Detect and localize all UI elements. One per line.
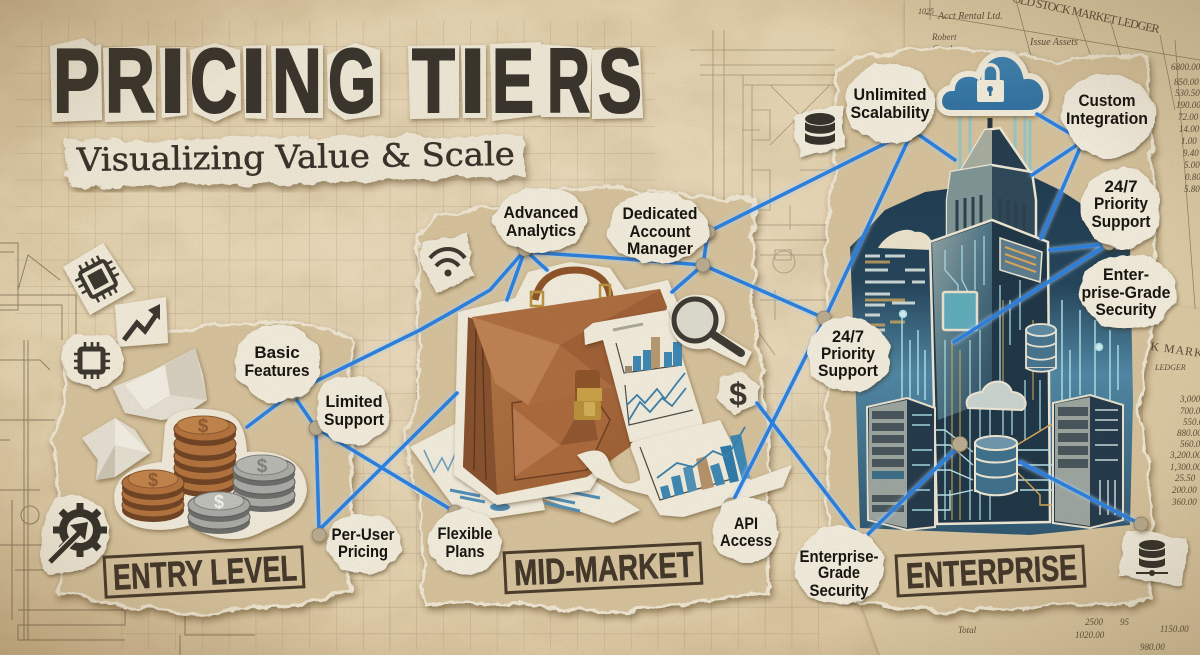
lower glow and traces [900,300,1118,400]
blueprint floor plan top [690,30,835,355]
panel sheet [405,187,768,612]
feature tag: basic features: Basic [254,343,300,362]
feature tag: per-user pricing: Pricing [338,542,388,561]
feature tag: unlimited scalability [845,63,935,143]
feature tag: 24/7 priority support middle: 24/7 [832,327,864,346]
feature tag: dedicated account manager [608,193,708,263]
label: mid-market stamp: MID-MARKET [513,544,695,593]
ledger handwriting: Good [932,44,952,54]
icon: database network [1119,530,1187,588]
server rack: left [867,398,935,530]
title letters: I [460,31,485,132]
small cloud [967,382,1026,410]
title letters: R [105,31,155,132]
feature tag: unlimited scalability: Scalability [850,103,930,122]
artwork: circuit city [850,115,1133,535]
server rack: right [1053,395,1123,528]
icon: cpu chip paper [63,243,134,315]
feature tag: enterprise-grade security right: Enter- [1103,265,1149,284]
ledger figures: 14.00 [1179,124,1200,134]
chart scroll: bottom [577,420,792,517]
feature tag: enterprise-grade security bottom [794,527,884,605]
ledger figures lower: 200.00 [1172,485,1197,495]
ledger figures lower: 25.50 [1175,473,1196,483]
feature tag: 24/7 priority support right [1081,168,1161,248]
title letters: P [53,31,100,132]
blue string connections [247,114,1140,540]
silver right stack: $ [257,456,268,477]
database: central [975,436,1017,495]
subtitle strip: Visualizing Value & Scale [76,135,515,179]
beams above tower [960,115,1030,175]
ledger figures lower: 360.00 [1171,497,1197,507]
feature tag: enterprise-grade security right [1079,254,1177,330]
feature tag: enterprise-grade security bottom: Grade [818,563,860,582]
feature tag: api access: API [734,514,758,533]
handle [535,270,610,300]
feature tag: api access: Access [720,531,772,550]
icon: coin stacks [114,409,307,539]
title letters: E [492,31,534,132]
icon: trending arrow paper [115,297,168,347]
ledger figures: 9.40 [1183,148,1199,158]
title letters: I [160,31,185,132]
ledger figures lower [958,363,1200,652]
feature tag: flexible plans [429,510,501,574]
code lines [865,256,925,330]
feature tag: advanced analytics: Analytics [506,221,576,240]
coin sticker outline [114,409,307,539]
title letter paper cutouts [50,38,643,122]
title letters [53,31,642,132]
copper tall stack [174,416,236,497]
icon: database tag [793,105,845,158]
title letters: R [547,31,590,132]
feature tag: enterprise-grade security right: prise-Grade [1082,283,1170,302]
silver front stack [188,492,250,534]
icon: cloud with padlock [939,54,1046,113]
ledger figures lower: 980.00 [1140,642,1165,652]
icon: magnifier [670,295,752,366]
graph paper grid [15,20,835,650]
copper tall stack: $ [198,416,209,437]
feature tag: limited support: Limited [326,392,382,411]
ledger figures lower: 3,000 [1179,394,1200,404]
title letters: T [412,31,455,132]
ledger figures: 5.00 [1184,160,1200,170]
bag body [463,289,667,495]
feature tag: 24/7 priority support middle [807,317,891,393]
panel: entry level [52,322,352,613]
feature tag: enterprise-grade security right: Security [1096,300,1157,319]
ledger figures: 6800.00 [1171,62,1200,72]
ledger handwriting: Acct Rental Ltd. [937,11,1003,22]
ledger figures: 530.50 [1175,88,1200,98]
feature tag: dedicated account manager: Dedicated [622,204,698,223]
icon: wifi [420,233,474,292]
ledger figures lower: 95 [1120,617,1130,627]
blueprint plan left [0,243,255,655]
label: entry level stamp: ENTRY LEVEL [112,547,298,598]
tower midsection [947,165,1036,238]
feature tag: dedicated account manager: Manager [627,239,693,258]
ledger figures: 1.00 [1181,136,1197,146]
feature tag: custom integration [1061,73,1155,157]
feature tag: basic features: Features [244,361,310,380]
tower base block [930,220,1050,524]
silver front stack: $ [214,492,224,512]
ledger figures lower: 2500 [1085,617,1104,627]
title letters: C [190,31,237,132]
ledger figures lower: Total [958,625,977,635]
feature tag: 24/7 priority support right: Priority [1094,194,1148,213]
feature tag: 24/7 priority support right: Support [1092,212,1151,231]
briefcase sticker outline [454,262,680,505]
icon: dollar: $ [729,376,747,412]
title letters: G [328,31,376,132]
icon: chip blob [61,333,123,387]
ledger handwriting [918,7,1078,54]
title letters: I [241,31,266,132]
silver right stack [233,455,295,512]
feature tag: flexible plans: Plans [446,542,484,561]
tower spire [988,118,992,135]
feature tag: limited support [316,375,390,445]
feature tag: custom integration: Integration [1066,109,1148,128]
panel: enterprise [793,48,1187,610]
panel sheet [52,322,352,613]
feature tag: dedicated account manager: Account [630,222,691,241]
copper small stack [122,470,184,522]
title: pricing tiers [50,31,643,132]
ledger sheet top right [905,0,1200,320]
panel sheet [826,48,1155,610]
icon: dollar [716,373,760,415]
tower chip [943,292,977,330]
feature tag: advanced analytics: Advanced [504,203,578,222]
label: enterprise stamp: ENTERPRISE [905,547,1078,596]
small cloud behind left [878,230,933,250]
feature tag: enterprise-grade security bottom: Security [810,581,869,600]
ledger handwriting: Robert [931,32,957,42]
gold clasp [575,370,600,420]
chart scroll: top [584,310,705,442]
dark sky backdrop [850,177,1133,535]
ledger handwriting: 1025 [918,7,934,16]
ledger sheet lower right [860,300,1200,655]
feature tag: enterprise-grade security bottom: Enterprise- [800,547,878,566]
circuit traces around data [905,425,1062,510]
feature tag: custom integration: Custom [1078,91,1136,110]
feature tag: 24/7 priority support middle: Support [818,361,878,380]
ledger figures lower: 1150.00 [1160,624,1189,634]
feature tag: flexible plans: Flexible [438,524,492,543]
database: upper [1026,324,1056,372]
panel: mid-market [405,187,792,612]
chart papers under briefcase [410,423,640,523]
feature tag: per-user pricing [325,513,401,573]
ledger handwriting: Issue Assets [1029,37,1078,48]
ledger figures: 850.00 [1174,77,1199,87]
title letters: S [598,31,642,132]
ledger figures: 72.00 [1178,112,1199,122]
tower screen [1000,238,1042,282]
ledger figures [1171,62,1200,194]
title letters: N [272,31,322,132]
ledger figures: 5.80 [1184,184,1200,194]
string pins [285,122,1148,546]
feature tag: per-user pricing: Per-User [332,525,395,544]
feature tag: basic features [234,326,320,402]
ledger figures lower: 1020.00 [1075,630,1105,640]
feature tag: api access [713,497,779,563]
icon: crumpled paper [82,348,207,480]
icon: gear with arrow [41,495,110,575]
feature tag: unlimited scalability: Unlimited [854,85,926,104]
feature tag: 24/7 priority support right: 24/7 [1104,177,1138,196]
feature tag: 24/7 priority support middle: Priority [821,344,875,363]
copper small stack: $ [148,470,158,490]
icon: briefcase [454,262,680,505]
flap [472,289,667,405]
feature tag: limited support: Support [324,410,384,429]
feature tag: advanced analytics [494,188,588,252]
ledger figures lower: LEDGER [1154,363,1186,372]
